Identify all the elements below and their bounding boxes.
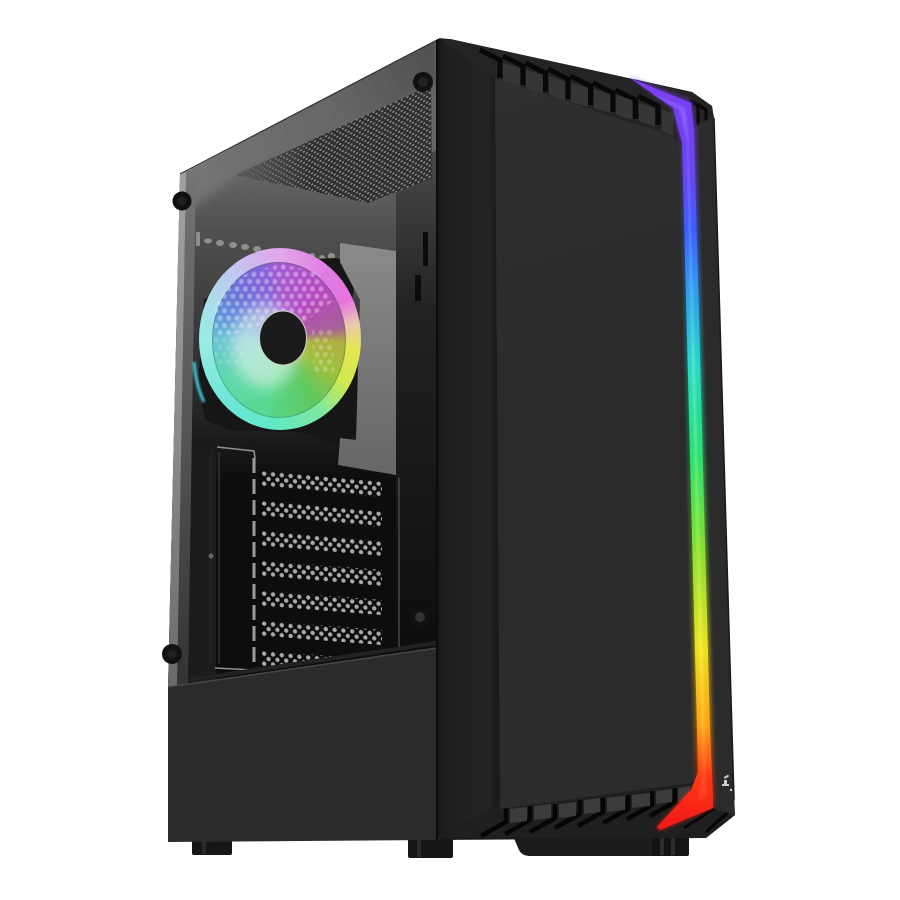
base shroud side panel: [168, 648, 440, 842]
fan outer glow arc: [194, 362, 204, 402]
logo mark: [722, 775, 732, 791]
pillar edge line: [436, 40, 438, 840]
screw bottom left: [162, 644, 182, 664]
strip highlight: [650, 92, 707, 802]
front bottom vent band: [437, 778, 735, 838]
bottom slots: [481, 788, 675, 836]
fan frame: [198, 258, 358, 432]
glass top edge: [180, 40, 437, 174]
screw top right: [413, 72, 433, 92]
top fins: [503, 63, 673, 136]
top slots: [480, 50, 658, 125]
shroud top highlight: [168, 648, 437, 687]
glass top band: [180, 42, 436, 207]
fan ring: [199, 248, 361, 430]
fan inner disc: [212, 262, 346, 418]
shroud top shadow: [188, 643, 437, 680]
drive cage plate: [338, 243, 396, 475]
front pillar: [437, 39, 499, 840]
strip colour: [630, 78, 713, 830]
case silhouette: [437, 39, 735, 840]
strip glow: [629, 76, 714, 831]
rgb light strip: [629, 76, 714, 831]
pc case illustration: [162, 38, 735, 858]
right top slots: [690, 100, 706, 128]
right side trim: [692, 116, 735, 815]
front top vent band: [438, 38, 714, 145]
left bracket: [211, 447, 255, 670]
screw bottom right: [409, 606, 431, 628]
thumb screws: [162, 72, 433, 664]
right trim edge: [714, 118, 734, 800]
left lower shade: [188, 458, 216, 684]
hub glow: [232, 304, 300, 388]
lower interior: [198, 445, 396, 662]
motherboard cutouts: [196, 232, 335, 259]
front main panel: [495, 78, 695, 809]
rear right column: [396, 150, 437, 655]
rgb fan: [194, 248, 361, 430]
top perforated panel: [236, 85, 432, 203]
feet: [192, 836, 689, 858]
glass side panel: [168, 30, 437, 690]
fan hub: [260, 311, 306, 365]
expansion slot perforations: [262, 471, 382, 668]
right bottom slots: [684, 808, 728, 832]
screw top left: [172, 192, 192, 210]
rear side line: [398, 478, 400, 650]
fan perforation dots: [212, 264, 334, 372]
bottom fins: [510, 786, 690, 823]
left glass frame: [168, 168, 196, 690]
left glass edge: [168, 170, 186, 690]
